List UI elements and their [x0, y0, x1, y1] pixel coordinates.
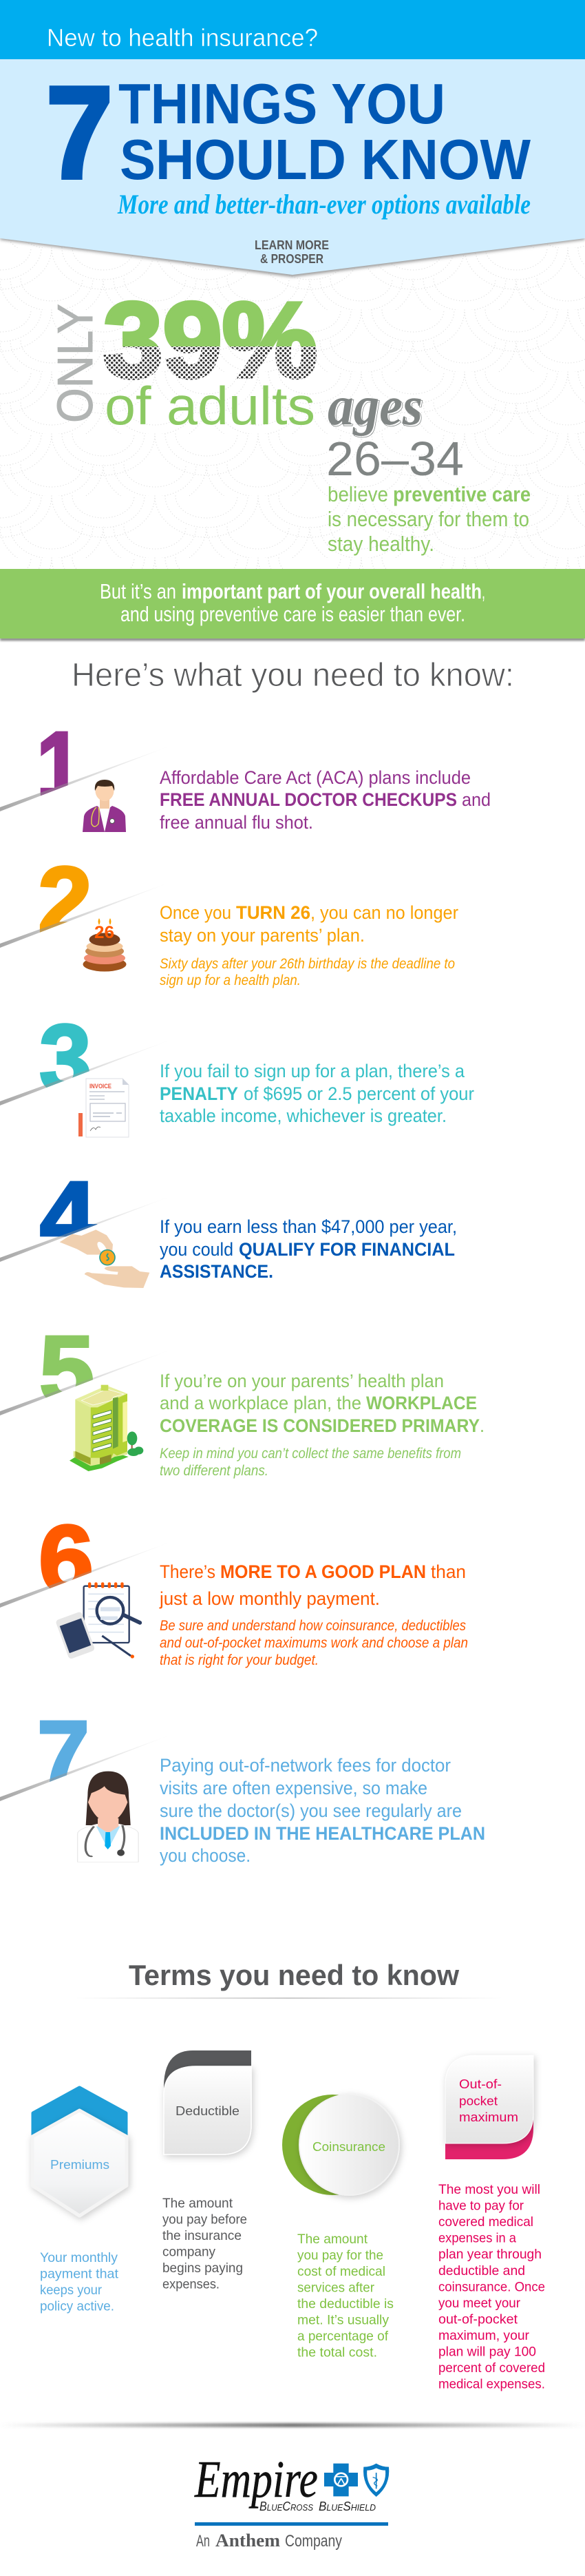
learn more and prosper mark: LEARN MORE	[255, 238, 329, 252]
text: item 6: Be sure and understand how coinsurance, deductibles	[160, 1618, 466, 1634]
description: begins paying	[162, 2261, 243, 2276]
wordmark BlueCross BlueShield: BlueShield	[319, 2500, 376, 2513]
text: item 5: two different plans.	[160, 1463, 268, 1479]
description: keeps your	[40, 2283, 102, 2298]
text: item 4: you could	[160, 1239, 233, 1260]
text: item 3: PENALTY	[160, 1083, 238, 1104]
icon: female doctor	[78, 1772, 138, 1862]
folded diagonal	[0, 1039, 172, 1116]
section heading: Here’s what you need to know:	[72, 657, 514, 694]
banner shadow	[0, 638, 585, 641]
logo: Empire BlueCross BlueShield	[194, 2451, 389, 2551]
text: item 5: COVERAGE IS CONSIDERED PRIMARY	[160, 1415, 480, 1436]
item 5	[0, 1316, 485, 1479]
big number seven: 7	[46, 60, 113, 206]
wordmark BlueCross BlueShield: BlueCross	[259, 2500, 313, 2513]
text: item 7: INCLUDED IN THE HEALTHCARE PLAN	[160, 1823, 485, 1844]
icon: invoice: INVOICE	[89, 1083, 111, 1090]
text: item 6: and out-of-pocket maximums work and choose a plan	[160, 1635, 468, 1651]
text: item 6	[159, 1561, 468, 1668]
title: THINGS YOU	[118, 72, 445, 136]
preventive care text	[328, 482, 531, 556]
header kicker: New to health insurance?	[47, 23, 318, 52]
banner text: But it’s an	[100, 579, 176, 603]
description: plan will pay 100	[438, 2345, 536, 2360]
icon: blue shield	[363, 2464, 389, 2497]
of adults: of adults	[105, 375, 315, 436]
description: covered medical	[438, 2214, 533, 2230]
description: the deductible is	[297, 2296, 394, 2312]
number 4: 4	[40, 1161, 96, 1269]
icon: notepad, magnifier and phone	[55, 1582, 140, 1659]
item 4	[0, 1161, 457, 1288]
description: plan year through	[438, 2247, 542, 2262]
wordmark Empire: Empire	[194, 2451, 318, 2509]
terms heading: Terms you need to know	[129, 1959, 459, 1991]
crescent badge	[282, 2095, 399, 2195]
panel: green banner	[0, 569, 585, 641]
description	[40, 2250, 119, 2314]
icon: office building	[70, 1385, 143, 1471]
chevron shadow	[0, 236, 585, 277]
description: you pay for the	[297, 2248, 383, 2263]
item 1	[0, 711, 491, 833]
description: the insurance	[162, 2228, 242, 2243]
text: item 2: stay on your parents’ plan.	[160, 925, 365, 946]
light blue chevron banner	[0, 59, 585, 275]
panel: header	[0, 0, 585, 569]
footer divider	[0, 2423, 585, 2427]
item 2	[0, 846, 458, 988]
text: item 5: .	[480, 1415, 485, 1436]
text: item 6: MORE TO A GOOD PLAN	[220, 1561, 426, 1582]
An Anthem Company: Anthem	[215, 2531, 280, 2551]
text: item 2	[160, 902, 458, 988]
description	[297, 2232, 394, 2360]
label: pocket	[459, 2094, 498, 2108]
text: item 7: visits are often expensive, so make	[160, 1778, 427, 1798]
text: item 2: TURN 26	[236, 902, 310, 923]
text: item 7: you choose.	[160, 1845, 251, 1866]
preventive care text: preventive care	[393, 482, 531, 506]
description: The amount	[162, 2196, 233, 2211]
logo rule	[195, 2522, 388, 2526]
ages script: ages	[329, 377, 424, 438]
folded diagonal	[0, 1349, 172, 1426]
description: The most you will	[438, 2182, 540, 2197]
banner background	[0, 569, 585, 638]
folded diagonal	[0, 1734, 172, 1808]
hexagon badge	[32, 2088, 127, 2216]
item 3	[0, 1004, 474, 1137]
description	[162, 2196, 247, 2292]
icon: birthday cake: 26	[94, 923, 114, 942]
rotated word only: ONLY	[48, 304, 103, 423]
label: Deductible	[176, 2104, 240, 2118]
top blue band	[0, 0, 585, 59]
39 percent figure	[103, 300, 317, 380]
description: have to pay for	[438, 2199, 524, 2214]
banner text	[100, 579, 485, 626]
text: item 1	[160, 767, 491, 833]
text: item 6: that is right for your budget.	[160, 1652, 319, 1668]
description: percent of covered	[438, 2360, 545, 2376]
title	[118, 72, 531, 191]
text: item 5	[160, 1371, 485, 1479]
folded diagonal	[0, 1196, 172, 1273]
item 7	[0, 1701, 485, 1866]
learn more and prosper mark: & PROSPER	[260, 252, 323, 266]
label: maximum	[459, 2110, 518, 2124]
number 1: 1	[36, 711, 82, 820]
folded diagonal	[0, 1541, 172, 1615]
text: item 5: Keep in mind you can’t collect the same benefits from	[160, 1446, 461, 1462]
39 percent figure: 39%	[103, 280, 317, 399]
label	[459, 2077, 518, 2124]
text: item 7: Paying out-of-network fees for doctor	[160, 1755, 451, 1776]
text: item 2: , you can no longer	[310, 902, 458, 923]
leaf badge	[445, 2055, 533, 2159]
description: services after	[297, 2280, 374, 2295]
description: a percentage of	[297, 2329, 389, 2344]
number 2: 2	[38, 846, 92, 955]
patterned backdrop	[0, 227, 585, 569]
panel: statistic	[48, 280, 531, 556]
text: item 5: WORKPLACE	[366, 1393, 477, 1413]
description: out-of-pocket	[438, 2312, 518, 2327]
text: item 7	[160, 1755, 485, 1866]
text: item 2: Once you	[160, 902, 231, 923]
number 6: 6	[39, 1505, 94, 1613]
folded diagonal	[0, 745, 172, 820]
text: item 4	[160, 1216, 457, 1282]
label: Out-of-	[459, 2077, 502, 2091]
ages script: ages	[328, 376, 423, 437]
text: item 1: FREE ANNUAL DOCTOR CHECKUPS	[160, 789, 457, 810]
text: item 1: and	[462, 789, 491, 810]
term: deductible	[162, 2050, 251, 2292]
An Anthem Company	[196, 2531, 342, 2551]
description: expenses in a	[438, 2231, 516, 2246]
icon: invoice	[78, 1079, 129, 1137]
text: item 3: taxable income, whichever is greater.	[160, 1105, 447, 1126]
folded diagonal	[0, 882, 172, 957]
term: out-of-pocket maximum	[438, 2055, 545, 2392]
icon: birthday cake	[83, 918, 127, 971]
term: premiums	[32, 2088, 127, 2314]
text: item 3	[160, 1061, 474, 1126]
description: deductible and	[438, 2263, 525, 2278]
text: item 5: If you’re on your parents’ health plan	[160, 1371, 444, 1391]
text: item 7: sure the doctor(s) you see regularly are	[160, 1800, 462, 1821]
description: company	[162, 2244, 215, 2259]
age range: 26–34	[326, 432, 464, 486]
number 3: 3	[39, 1004, 92, 1112]
text: item 3: If you fail to sign up for a plan, there’s a	[160, 1061, 465, 1081]
description: the total cost.	[297, 2345, 377, 2360]
description: you meet your	[438, 2296, 520, 2311]
description: The amount	[297, 2232, 368, 2247]
text: item 4: ASSISTANCE.	[160, 1261, 273, 1282]
text: item 5: and a workplace plan, the	[160, 1393, 361, 1413]
description: coinsurance. Once	[438, 2279, 545, 2294]
banner text: important part of your overall health	[182, 579, 482, 603]
description: policy active.	[40, 2299, 114, 2314]
number 5: 5	[39, 1316, 94, 1424]
learn more and prosper mark	[255, 238, 329, 266]
text: item 2: sign up for a health plan.	[160, 973, 301, 988]
text: item 6: than	[431, 1561, 466, 1582]
label: Coinsurance	[312, 2139, 385, 2154]
item 6	[0, 1505, 468, 1668]
description: Your monthly	[40, 2250, 118, 2265]
An Anthem Company: An	[196, 2532, 210, 2551]
preventive care text: is necessary for them to	[328, 507, 529, 531]
text: item 3: of $695 or 2.5 percent of your	[244, 1083, 474, 1104]
icon: blue cross	[324, 2464, 358, 2496]
banner text: and using preventive care is easier than ever.	[120, 602, 465, 626]
description: met. It’s usually	[297, 2313, 389, 2328]
description: payment that	[40, 2266, 119, 2281]
description: expenses.	[162, 2277, 220, 2292]
text: item 6: There’s	[160, 1561, 215, 1582]
number 7: 7	[37, 1701, 89, 1809]
39 percent figure: 39%	[103, 280, 317, 399]
description: cost of medical	[297, 2264, 385, 2279]
text: item 1: Affordable Care Act (ACA) plans include	[160, 767, 471, 788]
preventive care text: believe	[328, 482, 388, 506]
text: item 6: just a low monthly payment.	[159, 1588, 380, 1609]
text: item 1: free annual flu shot.	[160, 812, 313, 833]
icon: hands and coin	[60, 1229, 149, 1288]
term: coinsurance	[282, 2095, 399, 2360]
label: Premiums	[50, 2157, 109, 2172]
preventive care text: stay healthy.	[328, 532, 434, 556]
icon: doctor	[83, 780, 126, 832]
description: you pay before	[162, 2212, 247, 2227]
description: maximum, your	[438, 2328, 529, 2343]
title: SHOULD KNOW	[120, 127, 531, 191]
description: medical expenses.	[438, 2377, 545, 2392]
An Anthem Company: Company	[285, 2532, 342, 2551]
leaf badge	[164, 2050, 251, 2154]
description	[438, 2182, 545, 2392]
text: item 2: Sixty days after your 26th birthday is the deadline to	[160, 956, 455, 972]
banner text: ,	[482, 579, 485, 603]
text: item 4: QUALIFY FOR FINANCIAL	[239, 1239, 455, 1260]
text: item 4: If you earn less than $47,000 per year,	[160, 1216, 457, 1237]
wordmark BlueCross BlueShield	[259, 2500, 376, 2513]
